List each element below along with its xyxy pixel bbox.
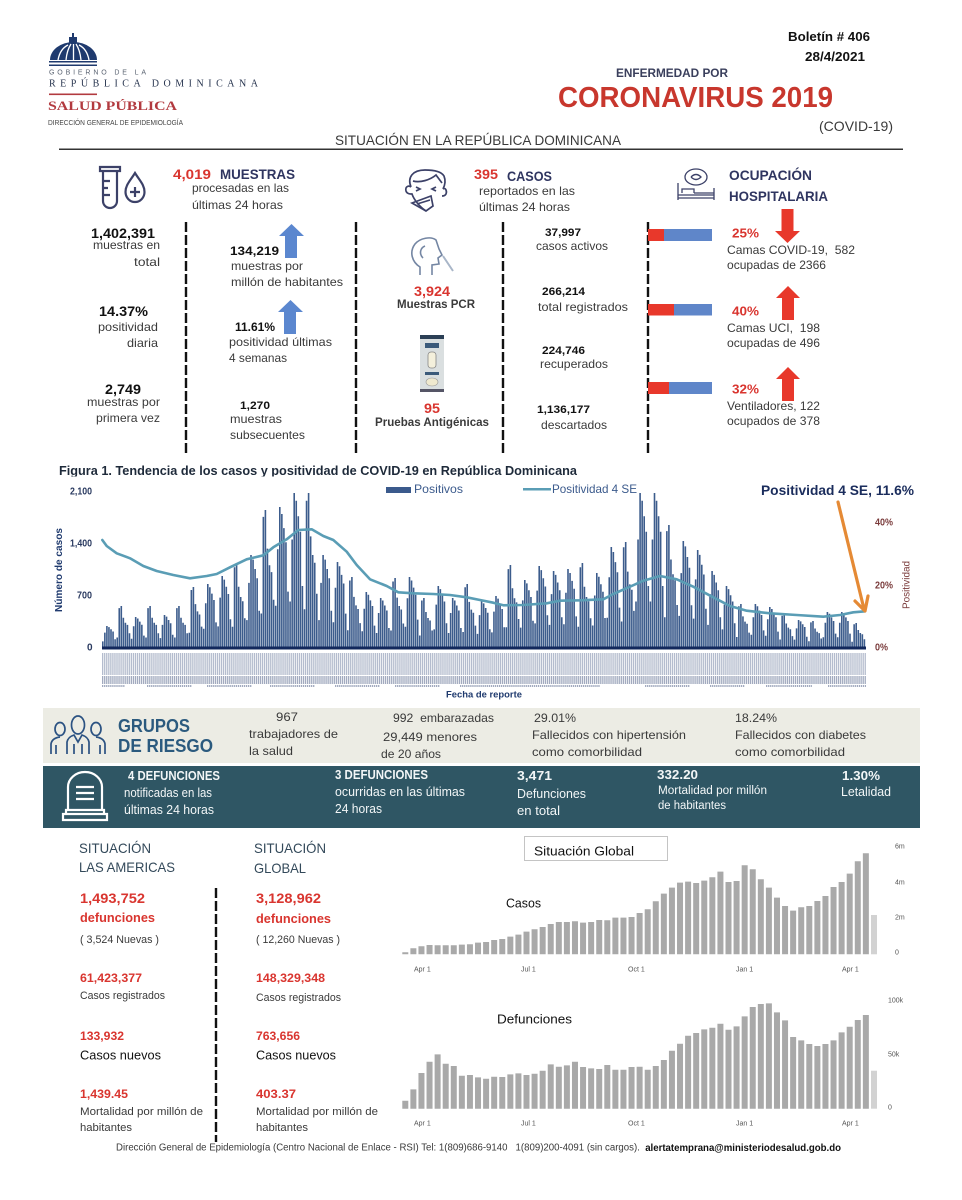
icon: nasal swab xyxy=(412,238,453,275)
stat: defunciones Américas: ( 3,524 Nuevas ) xyxy=(80,934,159,946)
heading: grupos de riesgo xyxy=(118,716,213,756)
stat: trabajadores de la salud: trabajadores de xyxy=(249,727,338,741)
stat: muestras PCR: 3,924 xyxy=(414,283,450,299)
axis labels: defunciones: Apr 1 xyxy=(842,1120,859,1128)
x axis title: Fecha de reporte xyxy=(446,690,522,700)
stat: diabetes: Fallecidos con diabetes xyxy=(735,728,866,742)
stat: defunciones ocurridas: ocurridas en las últimas xyxy=(335,785,465,799)
heading: global xyxy=(254,840,326,876)
header logo: Gobierno de la República Dominicana, Salud Pública xyxy=(48,33,259,127)
stat: casos nuevos global: 763,656 xyxy=(256,1029,300,1043)
heading: grupos de riesgo: DE RIESGO xyxy=(118,736,213,756)
bar: camas COVID-19 25% xyxy=(648,229,712,241)
icon: hospital bed xyxy=(678,169,714,200)
stat: pruebas antigénicas: 95 xyxy=(424,400,440,416)
stat: positividad últimas 4 semanas: 11.61% xyxy=(235,322,275,334)
title: CORONAVIRUS 2019 xyxy=(558,82,833,114)
heading: muestras: 4,019 xyxy=(173,166,211,182)
axis labels: defunciones: 100k xyxy=(888,998,904,1004)
bars: positivos xyxy=(102,493,865,648)
y axis labels: positividad: Positividad xyxy=(902,561,912,609)
panel: situación las Américas xyxy=(79,840,203,1134)
header logo: Gobierno de la República Dominicana, Salud Pública: GOBIERNO DE LA xyxy=(49,70,146,76)
header logo: Gobierno de la República Dominicana, Salud Pública: SALUD PÚBLICA xyxy=(48,99,177,113)
heading: casos: 395 xyxy=(474,166,498,182)
axis labels: casos: Apr 1 xyxy=(842,966,859,974)
stat: casos registrados Américas xyxy=(80,971,165,1002)
header logo: Gobierno de la República Dominicana, Salud Pública: REPÚBLICA DOMINICANA xyxy=(49,78,259,90)
stat: letalidad: 1.30% xyxy=(842,769,880,783)
heading: global: SITUACIÓN xyxy=(254,840,326,856)
stat: positividad diaria: 14.37% xyxy=(99,303,149,319)
date labels along the axis xyxy=(102,654,866,686)
legend xyxy=(386,482,637,496)
stat: casos nuevos global xyxy=(256,1029,336,1062)
stat: mortalidad Américas: Mortalidad por millón de xyxy=(80,1106,203,1118)
heading: ocupación hospitalaria xyxy=(729,166,828,204)
stat: defunciones Américas: 1,493,752 xyxy=(80,890,145,906)
stat: total registrados: 266,214 xyxy=(542,286,586,298)
axis labels: defunciones: 50k xyxy=(888,1052,900,1058)
figure title (clipped at the bottom): Figura 1. Tendencia de los casos y positividad de COVID-19 en República Dominicana xyxy=(59,464,578,478)
vertical dashed separators xyxy=(186,222,648,1142)
stat: embarazadas y menores de 20 años xyxy=(381,711,494,761)
stat: positividad últimas 4 semanas xyxy=(229,322,332,365)
stat: muestras subsecuentes: 1,270 xyxy=(240,400,270,412)
heading: muestras: últimas 24 horas xyxy=(192,198,283,212)
stat: hipertensión xyxy=(532,711,686,759)
chart: tendencia de casos y positividad xyxy=(53,482,915,700)
stat: descartados: descartados xyxy=(541,418,607,432)
stat: diabetes: como comorbilidad xyxy=(735,745,845,759)
stat: camas UCI: ocupadas de 496 xyxy=(727,336,820,350)
stat: muestras en total: muestras en xyxy=(93,238,160,252)
stat: defunciones notificadas: 4 DEFUNCIONES xyxy=(128,769,220,783)
chart: defunciones globales: Defunciones xyxy=(497,1012,573,1026)
axis labels: defunciones: Jul 1 xyxy=(521,1120,536,1128)
stat: mortalidad Américas: habitantes xyxy=(80,1122,133,1134)
stat: embarazadas y menores de 20 años: 29,449 menores xyxy=(383,730,477,744)
bar: semana en curso xyxy=(871,1071,877,1109)
stat: muestras por primera vez: primera vez xyxy=(96,411,160,425)
stat: camas UCI xyxy=(727,304,820,350)
heading: grupos de riesgo: GRUPOS xyxy=(118,716,190,736)
heading: muestras: procesadas en las xyxy=(192,181,289,195)
bulletin number and date: 28/4/2021 xyxy=(805,50,865,64)
chart: casos globales xyxy=(405,844,905,974)
stat: mortalidad Américas: 1,439.45 xyxy=(80,1087,128,1101)
stat: muestras PCR: Muestras PCR xyxy=(397,297,475,311)
stat: defunciones global: 3,128,962 xyxy=(256,890,321,906)
title: (COVID-19) xyxy=(819,118,893,134)
axis labels: casos: 4m xyxy=(895,880,905,886)
stat: muestras por primera vez: muestras por xyxy=(87,395,160,409)
arrow: up, muestras por millón xyxy=(279,224,304,258)
axis labels: defunciones: Oct 1 xyxy=(628,1120,645,1128)
stat: mortalidad global: Mortalidad por millón de xyxy=(256,1106,378,1118)
axis labels: casos xyxy=(414,844,905,974)
heading: ocupación hospitalaria: OCUPACIÓN xyxy=(729,166,812,183)
axis labels: casos: Oct 1 xyxy=(628,966,645,974)
stat: letalidad xyxy=(841,769,891,799)
arrow: up, camas UCI xyxy=(776,286,800,320)
chart: casos globales: Casos xyxy=(506,896,541,910)
bars: defunciones semanales xyxy=(405,1003,866,1109)
stat: defunciones Américas xyxy=(80,890,159,946)
stat: casos nuevos Américas: 133,932 xyxy=(80,1029,124,1043)
box: situación global label: Situación Global xyxy=(534,844,634,858)
stat: camas COVID-19: 25% xyxy=(732,226,759,240)
stat: embarazadas y menores de 20 años: 992 embarazadas xyxy=(393,711,494,725)
stat: recuperados xyxy=(540,345,608,371)
heading: casos: reportados en las xyxy=(479,184,575,198)
y axis labels: número de casos: 0 xyxy=(87,642,93,654)
footer: contact line: Dirección General de Epidemiología (Centro Nacional de Enlace - RSI) Tel: 1(809)686-9140 1(809)200-4091 (sin cargos). alertatemprana@ministeriodesalud.gob.do xyxy=(116,1142,841,1154)
subtitle: situation in the Dominican Republic: SITUACIÓN EN LA REPÚBLICA DOMINICANA xyxy=(335,132,622,148)
arrow: down, camas COVID-19 xyxy=(775,209,800,243)
stat: casos activos: casos activos xyxy=(536,239,608,253)
stat: pruebas antigénicas: Pruebas Antigénicas xyxy=(375,415,489,429)
axis labels: casos: 2m xyxy=(895,914,905,922)
stat: total registrados xyxy=(538,286,628,314)
heading: las Américas: SITUACIÓN xyxy=(79,840,151,856)
y axis labels: número de casos: 2,100 xyxy=(70,486,92,498)
icon: tombstone xyxy=(63,772,107,820)
stat: muestras por millón: millón de habitantes xyxy=(231,275,343,289)
stat: pruebas antigénicas xyxy=(375,400,489,429)
heading: casos xyxy=(474,166,575,214)
stat: defunciones ocurridas xyxy=(335,768,465,816)
stat: defunciones notificadas: notificadas en las xyxy=(124,786,212,800)
heading: global: GLOBAL xyxy=(254,860,306,876)
stat: mortalidad por millón: Mortalidad por millón xyxy=(658,785,767,797)
arrow: up, ventiladores xyxy=(776,367,800,401)
stat: embarazadas y menores de 20 años: de 20 años xyxy=(381,747,441,761)
stat: casos registrados global xyxy=(256,971,341,1004)
stat: trabajadores de la salud: 967 xyxy=(276,710,298,724)
heading: las Américas: LAS AMERICAS xyxy=(79,859,175,875)
axis labels: defunciones xyxy=(414,998,904,1128)
stat: mortalidad global: 403.37 xyxy=(256,1087,296,1101)
stat: hipertensión: como comorbilidad xyxy=(532,745,642,759)
axis labels: defunciones: Apr 1 xyxy=(414,1120,431,1128)
bulletin number and date: Boletín # 406 xyxy=(788,30,870,44)
stat: total registrados: total registrados xyxy=(538,300,628,314)
axis labels: casos: Apr 1 xyxy=(414,966,431,974)
stat: descartados: 1,136,177 xyxy=(537,404,590,416)
y axis labels: número de casos xyxy=(53,486,93,654)
panel: grupos de riesgo xyxy=(43,708,920,763)
stat: ventiladores: 32% xyxy=(732,382,759,396)
heading: casos: últimas 24 horas xyxy=(479,200,570,214)
stat: hipertensión: 29.01% xyxy=(534,711,576,725)
stat: positividad últimas 4 semanas: 4 semanas xyxy=(229,351,287,365)
stat: trabajadores de la salud: la salud xyxy=(249,744,293,758)
stat: casos nuevos Américas: Casos nuevos xyxy=(80,1048,161,1062)
stat: defunciones Américas: defunciones xyxy=(80,911,155,925)
y axis labels: positividad: 0% xyxy=(875,642,888,654)
stat: camas COVID-19: Camas COVID-19, 582 xyxy=(727,243,855,257)
stat: mortalidad por millón: 332.20 xyxy=(657,768,698,782)
stat: muestras en total: total xyxy=(134,255,160,269)
panel: ocupación hospitalaria xyxy=(648,166,855,428)
stat: positividad diaria: positividad xyxy=(98,320,158,334)
legend: Positivos xyxy=(414,482,463,496)
stat: casos activos xyxy=(536,227,608,253)
stat: muestras subsecuentes: subsecuentes xyxy=(230,428,305,442)
stat: casos registrados global: 148,329,348 xyxy=(256,971,325,985)
stat: positividad diaria: diaria xyxy=(127,336,158,350)
y axis labels: positividad: 20% xyxy=(875,580,893,592)
stat: casos activos: 37,997 xyxy=(545,227,581,239)
stat: recuperados: recuperados xyxy=(540,357,608,371)
stat: defunciones notificadas xyxy=(124,769,220,817)
icon: people xyxy=(51,716,105,754)
stat: defunciones ocurridas: 24 horas xyxy=(335,802,382,816)
stat: ventiladores xyxy=(727,382,820,428)
icon: capitol dome xyxy=(49,33,97,66)
panel: muestras xyxy=(87,166,343,442)
stat: ventiladores: ocupados de 378 xyxy=(727,414,820,428)
stat: defunciones en total: 3,471 xyxy=(517,769,552,783)
axis labels: defunciones: Jan 1 xyxy=(736,1120,753,1128)
y axis labels: número de casos: 700 xyxy=(77,590,92,602)
stat: casos nuevos Américas xyxy=(80,1029,161,1062)
stat: hipertensión: Fallecidos con hipertensión xyxy=(532,728,686,742)
stat: letalidad: Letalidad xyxy=(841,785,891,799)
arrow: up, positividad xyxy=(278,300,303,334)
stat: muestras subsecuentes xyxy=(230,400,305,442)
title: ENFERMEDAD POR xyxy=(616,66,728,80)
heading: muestras: MUESTRAS xyxy=(220,166,295,182)
y axis labels: número de casos: 1,400 xyxy=(70,538,92,550)
stat: trabajadores de la salud xyxy=(249,710,338,758)
line: positividad 4 SE xyxy=(102,529,865,617)
stat: diabetes: 18.24% xyxy=(735,711,777,725)
axis labels: defunciones: 0 xyxy=(888,1104,892,1112)
stat: mortalidad global xyxy=(256,1087,378,1134)
header logo: Gobierno de la República Dominicana, Salud Pública: DIRECCIÓN GENERAL DE EPIDEMIOLOGÍA xyxy=(48,118,183,127)
box: situación global label xyxy=(524,836,668,860)
axis labels: casos: Jul 1 xyxy=(521,966,536,974)
bulletin number and date xyxy=(788,30,870,64)
heading: ocupación hospitalaria: HOSPITALARIA xyxy=(729,188,828,204)
bar: semana en curso xyxy=(871,915,877,954)
stat: defunciones global: defunciones xyxy=(256,912,331,926)
title xyxy=(558,66,893,134)
stat: casos registrados global: Casos registrados xyxy=(256,992,341,1004)
stat: diabetes xyxy=(735,711,866,759)
y axis labels: número de casos: Número de casos xyxy=(53,528,65,612)
axis labels: casos: 6m xyxy=(895,844,905,850)
legend: Positividad 4 SE xyxy=(552,482,637,496)
stat: muestras por millón: muestras por xyxy=(231,259,303,273)
stat: muestras en total xyxy=(91,225,160,269)
stat: descartados xyxy=(537,404,607,432)
bar: ventiladores 32% xyxy=(648,382,712,394)
bar: camas UCI 40% xyxy=(648,304,712,316)
stat: muestras por primera vez xyxy=(87,381,160,425)
panel: casos xyxy=(375,166,628,432)
stat: mortalidad por millón: de habitantes xyxy=(658,800,726,812)
stat: defunciones en total: en total xyxy=(517,804,560,818)
stat: muestras por primera vez: 2,749 xyxy=(105,381,141,397)
heading: las Américas xyxy=(79,840,175,875)
y axis labels: positividad: 40% xyxy=(875,518,893,528)
stat: muestras PCR xyxy=(397,283,475,311)
callout: positividad 4 SE 11.6%: Positividad 4 SE, 11.6% xyxy=(761,482,915,498)
icon: face with mask xyxy=(406,170,446,211)
icon: test tube and blood drop xyxy=(100,167,144,208)
stat: defunciones notificadas: últimas 24 horas xyxy=(124,803,214,817)
stat: defunciones en total: Defunciones xyxy=(517,787,586,801)
stat: muestras subsecuentes: muestras xyxy=(230,412,282,426)
y axis labels: positividad xyxy=(875,518,912,654)
stat: casos registrados Américas: 61,423,377 xyxy=(80,971,142,985)
stat: mortalidad Américas xyxy=(80,1087,203,1134)
stat: camas COVID-19 xyxy=(727,226,855,272)
axis labels: casos: 0 xyxy=(895,950,899,956)
stat: ventiladores: Ventiladores, 122 xyxy=(727,399,820,413)
stat: defunciones global xyxy=(256,890,340,946)
stat: mortalidad por millón xyxy=(657,768,767,812)
arrow: orange pointer xyxy=(838,502,868,611)
stat: muestras en total: 1,402,391 xyxy=(91,225,155,241)
heading: muestras xyxy=(173,166,295,212)
stat: camas UCI: 40% xyxy=(732,304,759,318)
panel: defunciones xyxy=(43,766,920,828)
chart: defunciones globales xyxy=(405,998,904,1128)
bars: casos semanales xyxy=(405,853,866,954)
stat: camas UCI: Camas UCI, 198 xyxy=(727,321,820,335)
panel: situación global xyxy=(254,840,378,1134)
stat: muestras por millón xyxy=(230,244,343,289)
stat: positividad diaria xyxy=(98,303,158,350)
stat: recuperados: 224,746 xyxy=(542,345,585,357)
stat: defunciones ocurridas: 3 DEFUNCIONES xyxy=(335,768,428,782)
stat: casos nuevos global: Casos nuevos xyxy=(256,1048,336,1062)
stat: defunciones global: ( 12,260 Nuevas ) xyxy=(256,934,340,946)
stat: casos registrados Américas: Casos registrados xyxy=(80,990,165,1002)
stat: mortalidad global: habitantes xyxy=(256,1122,309,1134)
stat: defunciones en total xyxy=(517,769,586,818)
heading: casos: CASOS xyxy=(507,168,552,184)
icon: antigen test cassette xyxy=(420,335,444,392)
stat: camas COVID-19: ocupadas de 2366 xyxy=(727,258,826,272)
axis labels: casos: Jan 1 xyxy=(736,966,753,974)
stat: muestras por millón: 134,219 xyxy=(230,244,279,258)
stat: positividad últimas 4 semanas: positividad últimas xyxy=(229,335,332,349)
